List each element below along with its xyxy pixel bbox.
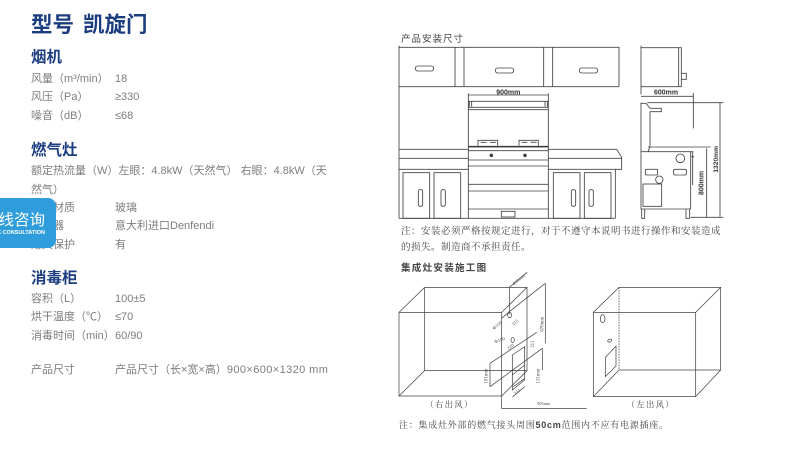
spec: panel material — [31, 202, 137, 214]
spec: product size — [31, 364, 328, 376]
dimensions: 211 — [531, 340, 536, 348]
heading: range hood: 烟机 — [31, 49, 62, 66]
panel: gas stove specs — [31, 142, 327, 251]
spec: rated heat flow: 然气） — [31, 184, 64, 196]
dimension: 800mm: 800mm — [699, 171, 706, 195]
spec: sterilizing time: 消毒时间（min） — [31, 330, 115, 342]
diagram: front elevation — [399, 46, 622, 218]
dimensions: 450mm — [512, 274, 527, 287]
spec: flameout protection: 有 — [115, 239, 126, 251]
diagram: right outlet box — [399, 272, 587, 410]
spec: drying temperature: 烘干温度（℃） — [31, 311, 108, 323]
dimensions: 315 — [511, 319, 521, 328]
spec: product size: 产品尺寸 — [31, 364, 75, 376]
spec: noise: 噪音（dB） — [31, 110, 88, 122]
spec: air flow: 风量（m³/min） — [31, 73, 109, 85]
heading: sterilizer cabinet: 消毒柜 — [31, 270, 78, 287]
note: warning second line: 的损失。制造商不承担责任。 — [401, 241, 531, 253]
diagram: left outlet box — [593, 287, 721, 409]
button: online consultation — [0, 198, 56, 248]
dimensions: 670mm — [540, 317, 545, 332]
dimension: 1320mm: 1320mm — [713, 146, 720, 173]
panel: range hood specs — [31, 48, 139, 122]
spec: panel material: 面板材质 — [31, 202, 75, 214]
spec: air flow: 18 — [115, 73, 127, 85]
spec: flameout protection: 熄火保护 — [31, 239, 75, 251]
dimensions: 181mm — [484, 368, 489, 383]
spec: flameout protection — [31, 238, 126, 251]
heading: gas stove: 燃气灶 — [31, 142, 78, 159]
spec: igniter: 意大利进口Denfendi — [115, 220, 214, 232]
dimensions: 220 — [507, 343, 516, 352]
spec: noise: ≤68 — [115, 110, 133, 122]
spec: sterilizing time: 60/90 — [115, 330, 143, 342]
dimension: 600mm: 600mm — [654, 89, 678, 96]
heading: installation size: 产品安装尺寸 — [401, 33, 464, 45]
spec: air pressure: ≥330 — [115, 91, 139, 103]
label: left outlet: （左出风） — [627, 399, 675, 409]
dimensions: 211 — [513, 388, 523, 397]
spec: volume: 容积（L） — [31, 293, 81, 305]
spec: igniter: 点火器 — [31, 220, 64, 232]
spec: product size: 产品尺寸（长×宽×高）900×600×1320 mm — [115, 364, 328, 376]
dimensions — [484, 274, 551, 406]
spec: volume: 100±5 — [115, 293, 146, 305]
note: installation warning: 注：安装必须严格按规定进行，对于不遵守本说明书进行操作和安装造成 — [401, 225, 721, 237]
spec: panel material: 玻璃 — [115, 202, 137, 214]
dimensions: Φ100 — [494, 337, 506, 345]
panel: sterilizer cabinet specs — [31, 270, 146, 342]
spec: air pressure: 风压（Pa） — [31, 91, 88, 103]
note: gas connector warning: 注：集成灶外部的燃气接头周围50cm范围内不应有电源插座。 — [399, 419, 669, 430]
spec: air pressure — [31, 91, 139, 103]
spec: igniter — [31, 220, 214, 232]
label: right outlet: （右出风） — [425, 400, 474, 410]
spec: rated heat flow: 额定热流量（W）左眼：4.8kW（天然气） 右眼：4.8kW（天 — [31, 165, 327, 177]
dimension: 900mm: 900mm — [496, 89, 520, 96]
spec: drying temperature: ≤70 — [115, 311, 133, 323]
dimensions: Φ150 — [492, 320, 504, 332]
dimensions: 131mm — [536, 368, 541, 383]
spec: rated heat flow — [31, 164, 327, 196]
heading: construction diagram: 集成灶安装施工图 — [401, 262, 487, 274]
diagram: side elevation — [641, 46, 723, 218]
dimensions: 905mm — [537, 401, 551, 406]
spec: noise — [31, 110, 133, 122]
spec: volume — [31, 292, 146, 305]
title: 型号 凯旋门 — [31, 13, 147, 37]
